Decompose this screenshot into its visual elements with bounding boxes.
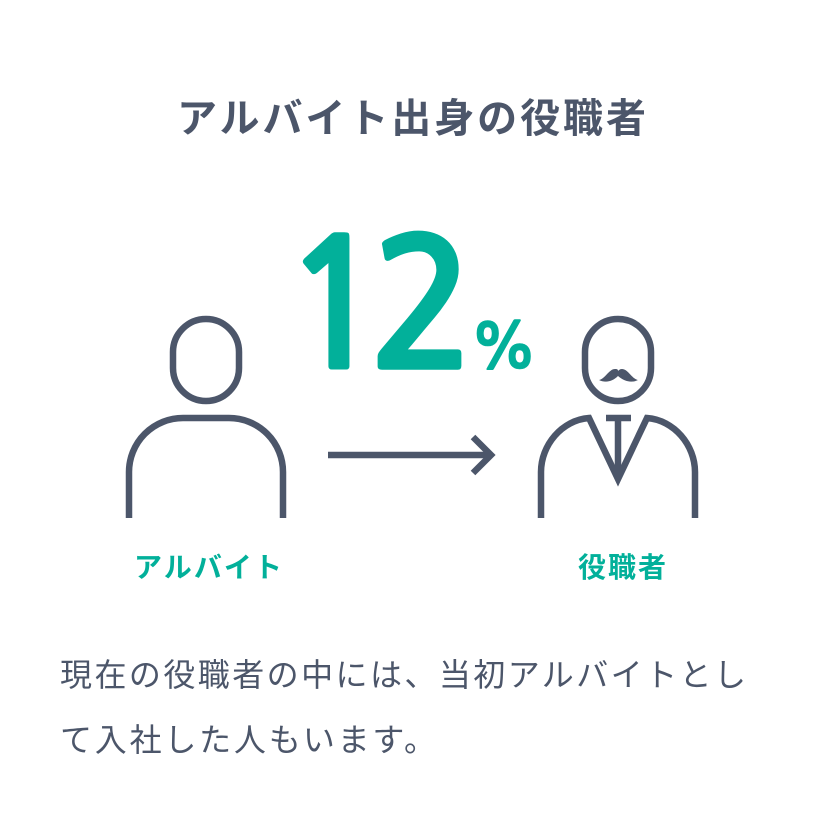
big number: 12 percent: 1: [281, 218, 389, 395]
icon: manager with moustache: [541, 319, 695, 518]
body text: [60, 657, 746, 758]
icon: part-time worker: [129, 319, 283, 518]
arrow: [328, 437, 491, 473]
title: アルバイト出身の役職者: [177, 97, 646, 141]
big number: 12 percent: 2: [368, 218, 476, 395]
body text: て入社した人もいます。: [60, 722, 436, 758]
label: manager: 役職者: [578, 552, 666, 583]
big number: 12 percent: %: [470, 318, 538, 379]
big number: 12 percent: [281, 218, 538, 395]
label: part-time worker: アルバイト: [134, 552, 282, 583]
body text: 現在の役職者の中には、当初アルバイトとし: [60, 657, 746, 693]
